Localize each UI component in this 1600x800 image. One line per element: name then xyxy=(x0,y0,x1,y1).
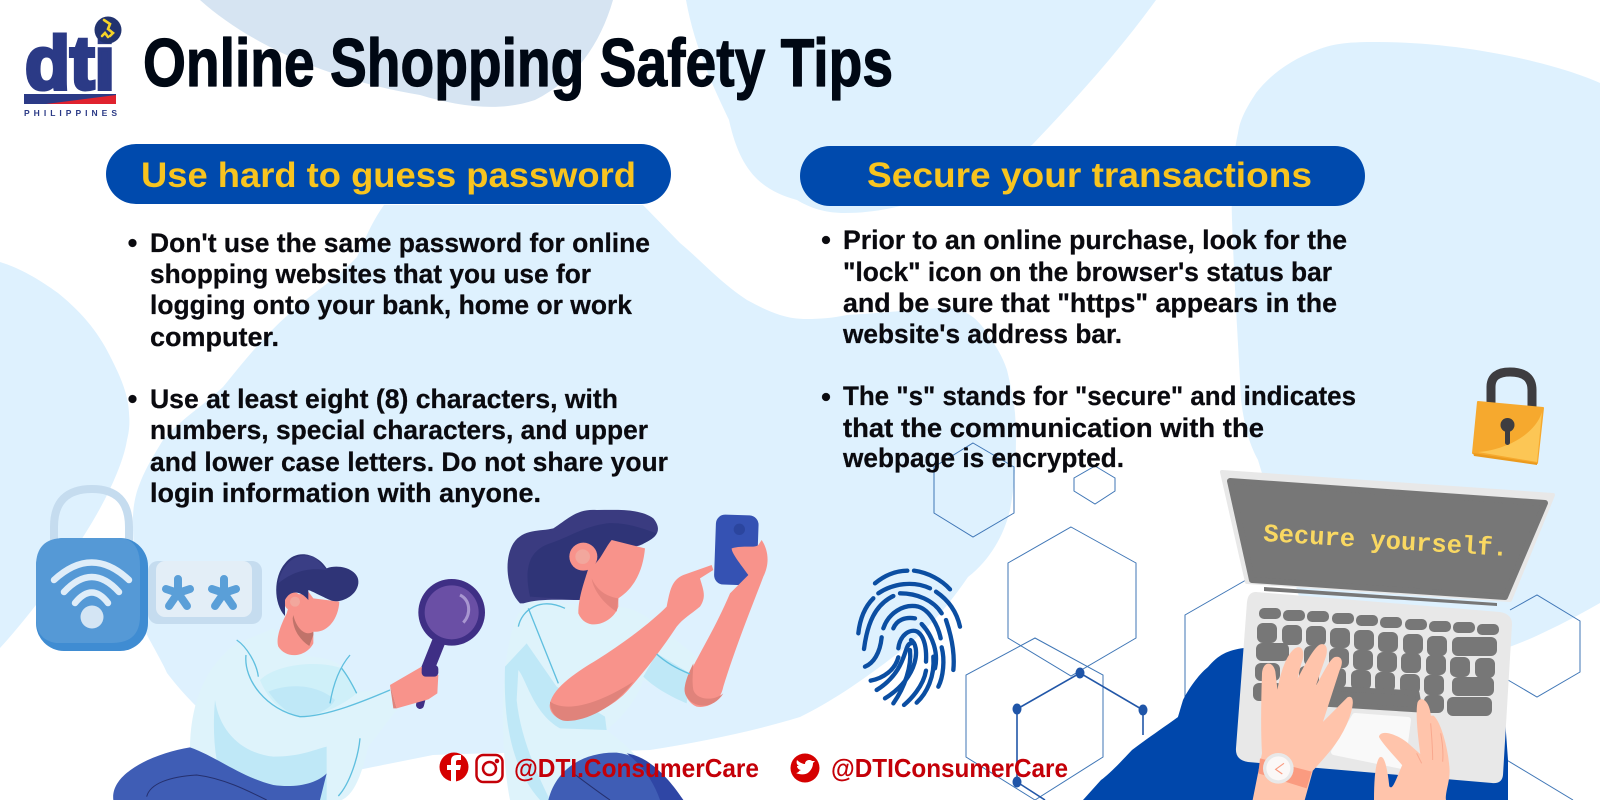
woman's hair xyxy=(508,510,658,603)
title: Online Shopping Safety Tips xyxy=(143,25,893,101)
twitter handle: @DTIConsumerCare xyxy=(831,753,1068,783)
icon: twitter xyxy=(790,754,820,782)
illustration: password field xyxy=(148,561,262,624)
man's hand xyxy=(390,667,438,708)
woman's shirt lines xyxy=(518,604,690,683)
pill heading: transactions xyxy=(800,146,1365,206)
bullet list two: numbers, special characters, and upper xyxy=(150,415,648,445)
logo: DTI Philippines: dti xyxy=(25,21,115,105)
left hand xyxy=(1254,645,1351,800)
pill heading: transactions: Secure your transactions xyxy=(867,156,1312,195)
icon: instagram xyxy=(476,755,502,782)
woman's trousers xyxy=(548,753,683,800)
text: password tips xyxy=(128,228,668,508)
illustration: laptop xyxy=(1222,472,1553,800)
hands and watch xyxy=(1254,645,1449,800)
illustration: wifi lock xyxy=(36,489,148,651)
laptop screen xyxy=(1230,481,1545,597)
bullet list one: logging onto your bank, home or work xyxy=(150,290,632,320)
bullet list three: Prior to an online purchase, look for the xyxy=(843,225,1347,255)
screen text: Secure yourself. xyxy=(1263,520,1509,564)
text: transaction tips xyxy=(822,225,1356,473)
man's face and neck xyxy=(278,592,339,655)
bullet list three: and be sure that "https" appears in the xyxy=(843,288,1337,318)
facebook and instagram handle: @DTI.ConsumerCare xyxy=(514,753,759,783)
bullet list one: Don't use the same password for online xyxy=(150,228,650,258)
bullet list three: "lock" icon on the browser's status bar xyxy=(843,257,1332,287)
man's shirt xyxy=(190,628,397,800)
logo: DTI Philippines: PHILIPPINES xyxy=(24,108,117,118)
man's shirt lines xyxy=(237,640,390,796)
laptop lid xyxy=(1222,472,1553,600)
woman's face and neck xyxy=(578,540,645,624)
man's hair xyxy=(276,554,358,616)
bullet list four xyxy=(822,381,1356,473)
man's trousers xyxy=(113,747,327,800)
icon: fingerprint xyxy=(858,571,960,705)
bullet list two xyxy=(128,384,668,508)
phone xyxy=(714,514,759,586)
illustration: gold padlock xyxy=(1473,372,1543,465)
bullet list four: The "s" stands for "secure" and indicates xyxy=(843,381,1356,411)
bullet list two: and lower case letters. Do not share your xyxy=(150,447,668,477)
woman's arms xyxy=(685,540,768,707)
footer social handles xyxy=(440,752,1068,783)
bullet list one xyxy=(128,228,650,352)
bullet list four: that the communication with the xyxy=(843,413,1264,443)
bullet list one: shopping websites that you use for xyxy=(150,259,591,289)
magnifying glass xyxy=(427,640,439,672)
right hand xyxy=(1375,700,1449,800)
keyboard xyxy=(1253,608,1499,716)
bullet list one: computer. xyxy=(150,322,279,352)
touchpad xyxy=(1334,716,1408,766)
decorative hexagon network xyxy=(934,443,1580,800)
pill heading: password xyxy=(106,144,671,204)
pill heading: password: Use hard to guess password xyxy=(141,156,636,195)
icon: facebook xyxy=(440,752,468,782)
bullet list two: login information with anyone. xyxy=(150,478,541,508)
bullet list four: webpage is encrypted. xyxy=(842,443,1124,473)
hinge xyxy=(1264,587,1497,606)
bullet list three: website's address bar. xyxy=(842,319,1122,349)
bullet list two: Use at least eight (8) characters, with xyxy=(150,384,618,414)
watch xyxy=(1258,758,1312,788)
bullet list three xyxy=(822,225,1347,349)
illustration: woman with phone xyxy=(503,510,768,800)
blue blob behind laptop xyxy=(1083,648,1508,800)
illustration: man with magnifier xyxy=(113,554,485,800)
woman's shirt xyxy=(503,601,697,800)
laptop base xyxy=(1236,592,1512,783)
